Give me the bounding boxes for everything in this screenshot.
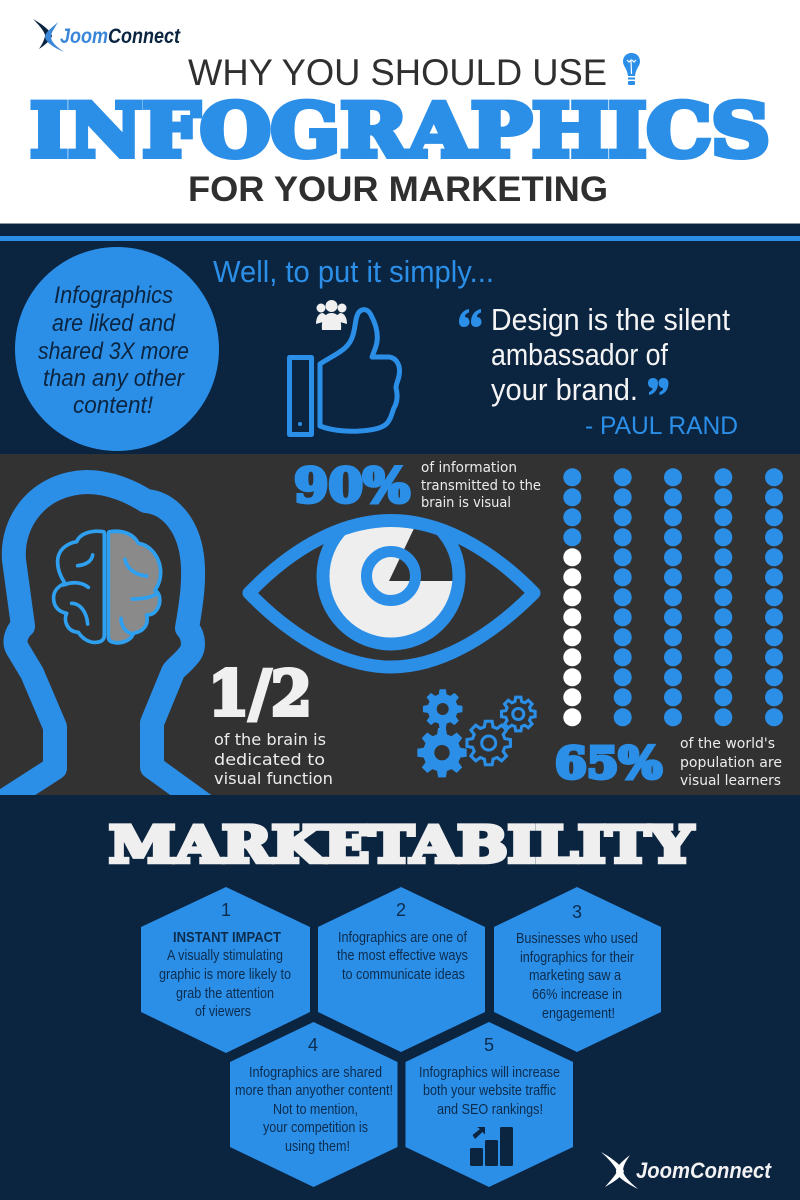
callout: liked and shared circle: are liked and	[52, 310, 176, 337]
hexagon 5: 5	[484, 1035, 494, 1055]
text: 65% caption: population are	[680, 755, 782, 771]
hexagon 1: 1	[221, 900, 231, 920]
hexagon 3	[494, 887, 661, 1052]
icon: light bulb	[623, 53, 640, 85]
text: 65% caption: of the world's	[680, 736, 775, 752]
hexagon 1: of viewers	[195, 1003, 251, 1020]
text: 1/2 caption: visual function	[214, 769, 333, 788]
hexagon 2	[318, 887, 485, 1052]
hexagon 3: marketing saw a	[529, 967, 622, 984]
icon: people group	[316, 300, 347, 330]
chart: dot matrix 65%	[563, 468, 783, 726]
hexagon 1	[141, 887, 310, 1053]
text: 1/2 caption: of the brain is	[214, 730, 326, 749]
title line 3: FOR YOUR MARKETING	[188, 170, 608, 209]
panel: marketability	[0, 795, 800, 1200]
hexagon 2: Infographics are one of	[338, 929, 468, 946]
icon: gears	[417, 689, 535, 777]
hexagon 3: 66% increase in	[532, 986, 622, 1003]
title line 1: WHY YOU SHOULD USE	[188, 52, 607, 93]
hexagon 3: infographics for their	[520, 949, 634, 966]
quote: - PAUL RAND	[585, 412, 738, 440]
quote: your brand.	[491, 372, 638, 407]
stat: 90%: 90%	[294, 459, 410, 514]
hexagon 1: grab the attention	[176, 985, 274, 1002]
logo: JoomConnect top: JoomConnect	[60, 25, 181, 48]
header background	[0, 0, 800, 223]
hexagon 4: Not to mention,	[273, 1101, 358, 1118]
text: 65% caption: visual learners	[680, 773, 781, 789]
hexagon 4: 4	[308, 1035, 318, 1055]
heading: well, to put it simply: Well, to put it simply...	[213, 254, 494, 289]
quote	[459, 302, 738, 440]
hexagon 4	[230, 1022, 398, 1187]
hexagon 5: Infographics will increase	[419, 1064, 560, 1081]
icon: thumbs up	[290, 310, 400, 434]
quote: Design is the silent	[491, 302, 730, 337]
logo: JoomConnect top	[33, 19, 181, 52]
title: INFOGRAPHICS: INFOGRAPHICS	[30, 88, 770, 174]
text: 90% caption	[421, 460, 541, 511]
hexagon 2: the most effective ways	[337, 947, 468, 964]
panel: visual statistics	[0, 454, 800, 806]
hexagon 3: engagement!	[542, 1005, 615, 1022]
stat: 65%: 65%	[555, 739, 662, 789]
hexagon 5	[406, 1022, 573, 1187]
callout: liked and shared circle: Infographics	[54, 282, 173, 309]
hexagon 1: graphic is more likely to	[159, 966, 291, 983]
icon: brain half filled	[54, 531, 161, 643]
hexagon 5: and SEO rankings!	[437, 1101, 543, 1118]
callout: liked and shared circle	[15, 247, 219, 451]
icon: growth chart	[470, 1127, 513, 1166]
icon: head outline	[0, 482, 206, 806]
text: 1/2 caption: dedicated to	[214, 750, 325, 769]
hexagon 5: both your website traffic	[423, 1082, 556, 1099]
hexagon 1: INSTANT IMPACT	[173, 929, 281, 946]
text: 90% caption: transmitted to the	[421, 478, 541, 494]
hexagon 2: 2	[396, 900, 406, 920]
callout: liked and shared circle: shared 3X more	[38, 338, 189, 365]
quote: ambassador of	[491, 337, 668, 372]
panel: intro	[0, 223, 800, 454]
hexagon 4: Infographics are shared	[249, 1064, 382, 1081]
hexagon 4: more than anyother content!	[235, 1082, 393, 1099]
text: 65% caption	[680, 736, 782, 789]
icon: eye	[249, 508, 534, 667]
hexagon 3: 3	[572, 902, 582, 922]
logo: JoomConnect bottom	[601, 1152, 773, 1189]
hexagon 4: your competition is	[263, 1119, 368, 1136]
hexagon 1: A visually stimulating	[167, 947, 283, 964]
callout: liked and shared circle: content!	[73, 392, 153, 419]
hexagon 4: using them!	[285, 1138, 350, 1155]
text: 1/2 caption	[214, 730, 333, 788]
hexagon 3: Businesses who used	[516, 930, 638, 947]
text: 90% caption: brain is visual	[421, 495, 511, 511]
hexagon 2: to communicate ideas	[342, 966, 465, 983]
stat: 1/2: 1/2	[208, 657, 312, 730]
logo: JoomConnect bottom: JoomConnect	[636, 1158, 773, 1183]
callout: liked and shared circle: than any other	[43, 365, 185, 392]
heading: marketability: MARKETABILITY	[109, 815, 695, 874]
text: 90% caption: of information	[421, 460, 517, 476]
